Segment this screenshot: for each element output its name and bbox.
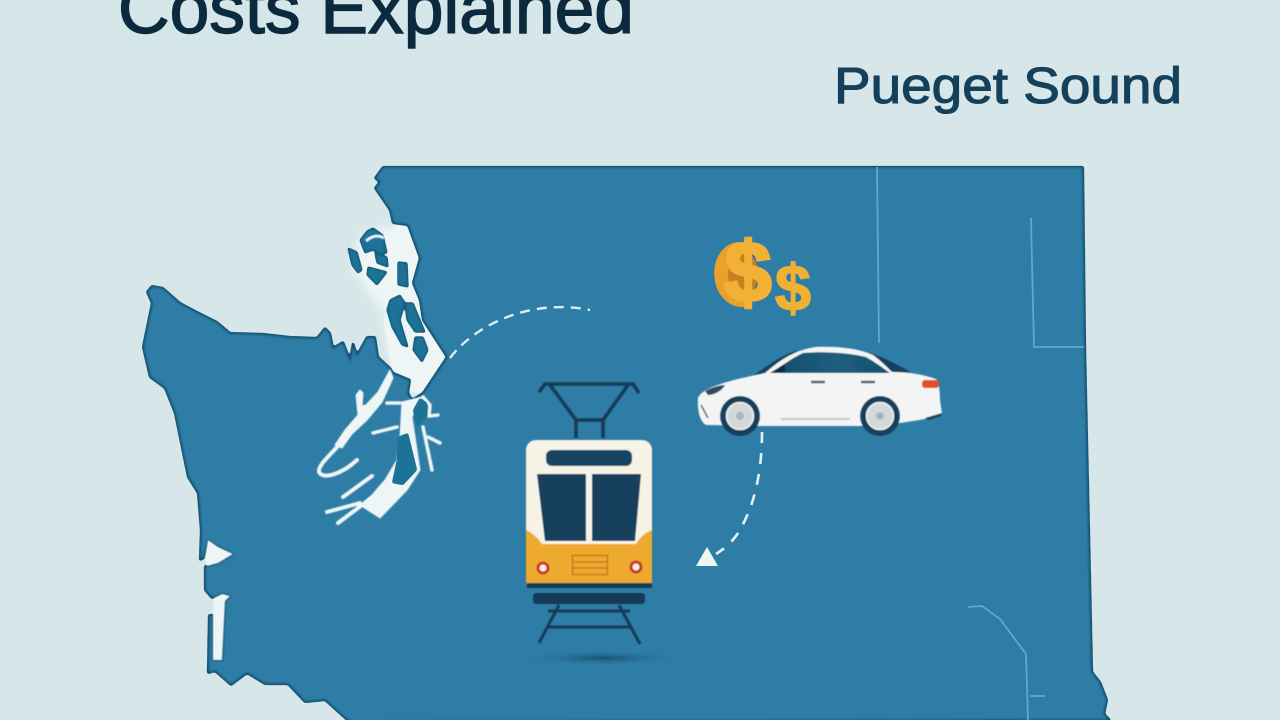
bumper bbox=[533, 593, 645, 604]
San Juan and Whidbey islands bbox=[348, 228, 428, 362]
large dollar sign: $ bbox=[725, 225, 771, 319]
side windows bbox=[770, 352, 890, 373]
coin crescent behind large dollar bbox=[715, 243, 745, 306]
rear bumper shadow bbox=[925, 413, 942, 420]
headlight bbox=[705, 385, 725, 395]
small dollar sign: $ bbox=[775, 251, 811, 324]
Vashon and Kitsap land pieces bbox=[392, 398, 427, 485]
sound water glow bbox=[350, 226, 448, 394]
front grille bbox=[572, 556, 608, 574]
dark base strip bbox=[527, 583, 652, 588]
tram body bbox=[526, 440, 652, 587]
front wheel bbox=[720, 396, 760, 436]
pantograph bbox=[539, 384, 639, 438]
window pillar shadow bbox=[770, 364, 785, 373]
rails and ties bbox=[539, 605, 640, 644]
door handles and sill bbox=[811, 381, 875, 383]
map of Washington state bbox=[143, 167, 1110, 720]
rear wheel bbox=[860, 396, 900, 436]
dashed arrow from car to tram bbox=[696, 432, 762, 566]
bright channel near east shore bbox=[384, 226, 447, 393]
dashed route arc from the sound bbox=[450, 307, 590, 358]
interior border lines bbox=[877, 167, 1084, 720]
yellow lower panel bbox=[526, 530, 652, 587]
ground shadow bbox=[517, 650, 687, 666]
Grays Harbor and Willapa Bay bbox=[205, 540, 233, 660]
coin inner shade bbox=[728, 252, 758, 296]
subtitle: region label: Pueget Sound bbox=[834, 57, 1182, 114]
arrowhead bbox=[696, 547, 718, 566]
right window bbox=[592, 474, 641, 541]
left window bbox=[537, 474, 586, 541]
dark roof trim bbox=[753, 350, 912, 376]
car body bbox=[698, 347, 942, 426]
right headlight bbox=[631, 562, 641, 572]
icon: white car bbox=[698, 347, 942, 436]
island channel highlight bbox=[366, 236, 384, 241]
left headlight bbox=[538, 563, 548, 573]
destination display bbox=[546, 450, 632, 466]
state landmass bbox=[143, 167, 1110, 720]
icon: dollar signs bbox=[715, 225, 811, 324]
front bumper vents bbox=[701, 405, 708, 418]
icon: tram bbox=[517, 384, 687, 666]
southern Puget Sound inlets bbox=[319, 370, 440, 523]
tail light bbox=[922, 380, 939, 388]
